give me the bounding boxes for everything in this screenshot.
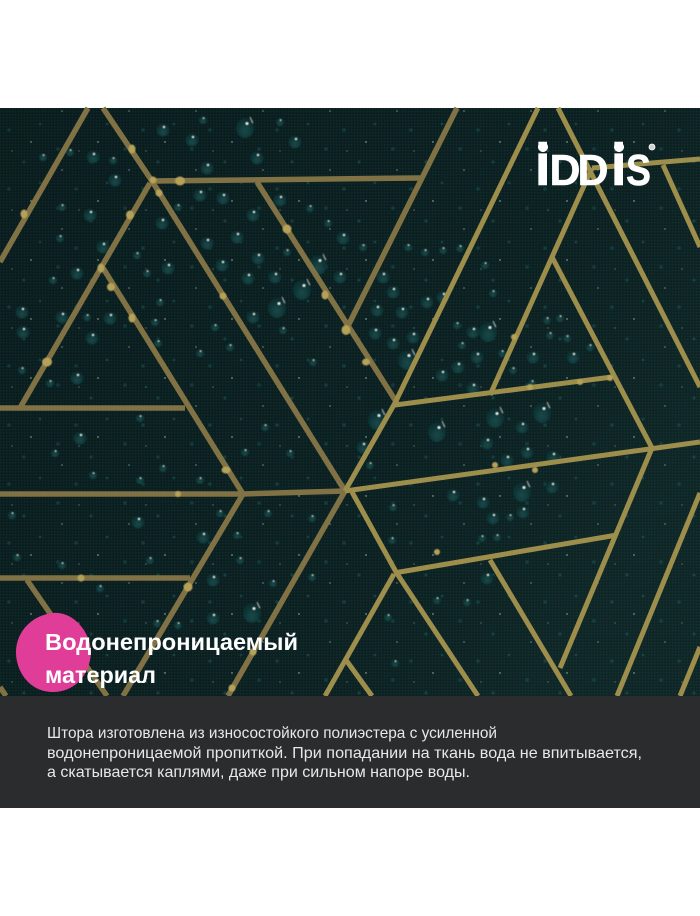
gold geometric lines — [0, 108, 700, 696]
description text — [47, 725, 642, 781]
heading: Водонепроницаемый — [45, 629, 298, 655]
heading — [45, 629, 298, 688]
water droplets — [8, 116, 594, 667]
description text: а скатывается каплями, даже при сильном напоре воды. — [47, 764, 470, 781]
logo: iDDIS: i — [610, 132, 627, 198]
photo: dark green fabric with gold pattern and water drops — [0, 108, 700, 696]
heading: материал — [45, 662, 156, 688]
gold tinted drops on the lines — [20, 144, 613, 692]
pink accent blob — [16, 613, 91, 692]
description panel — [0, 696, 700, 808]
logo: iDDIS: S — [626, 146, 651, 195]
description text: Штора изготовлена из износостойкого полиэстера с усиленной — [47, 725, 497, 742]
logo: iDDIS — [534, 132, 655, 198]
logo: iDDIS: i — [534, 132, 551, 198]
description text: водонепроницаемой пропиткой. При попадании на ткань вода не впитывается, — [47, 745, 642, 762]
logo: iDDIS: D — [578, 146, 608, 195]
logo: iDDIS: D — [550, 146, 580, 195]
